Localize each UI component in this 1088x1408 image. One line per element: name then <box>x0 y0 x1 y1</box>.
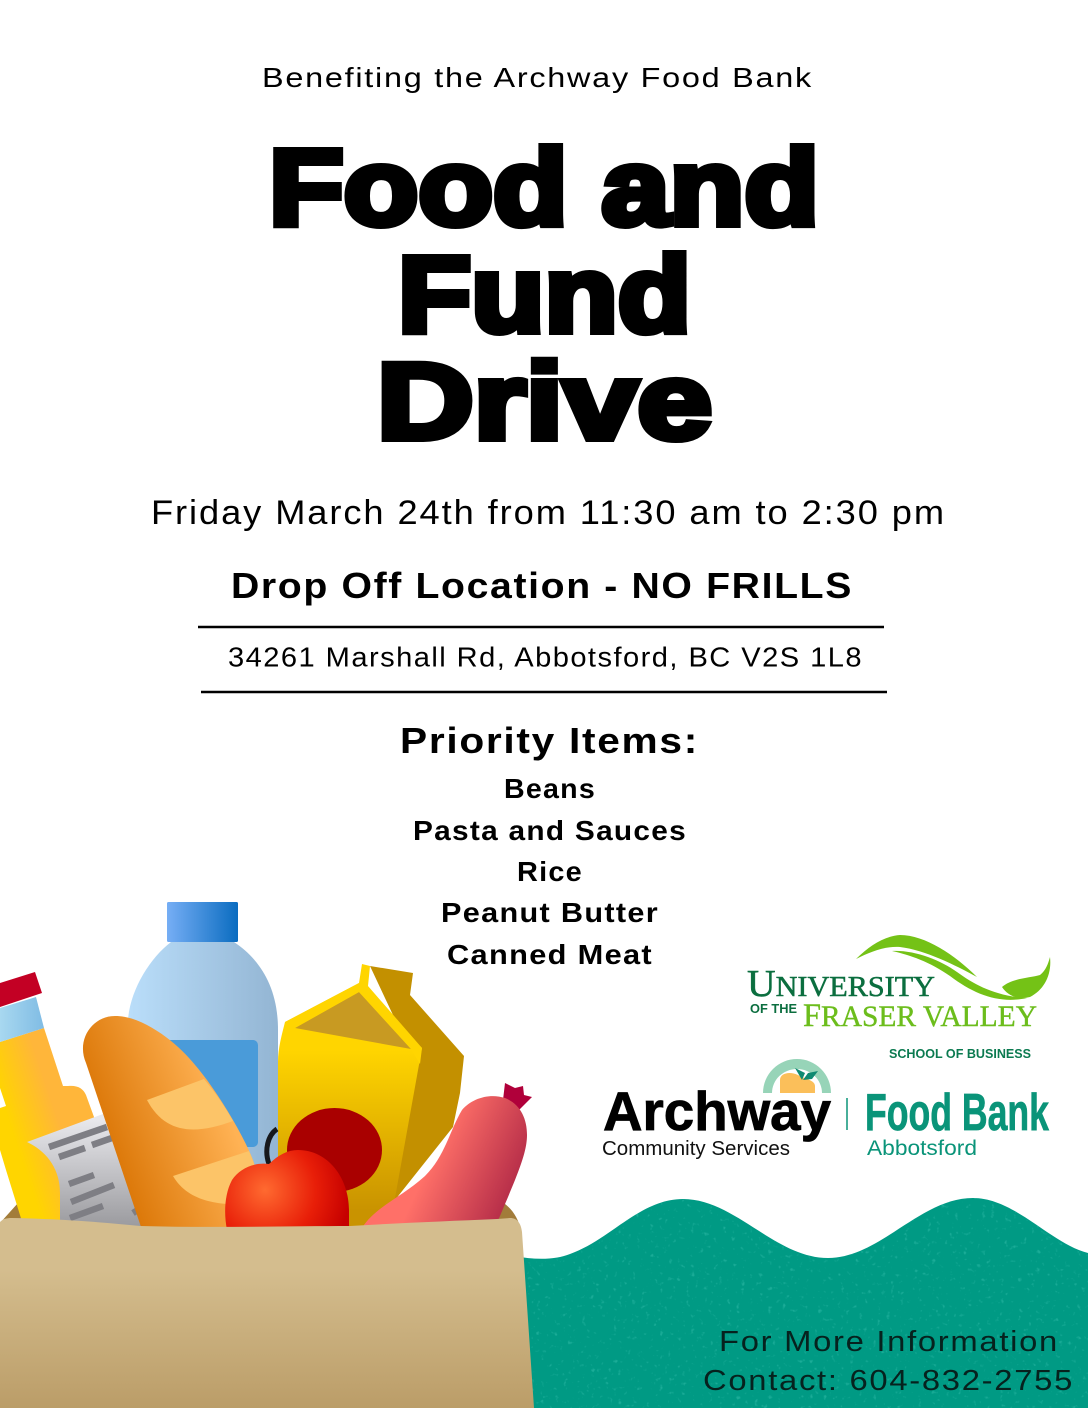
logo: University of the Fraser Valley <box>747 935 1050 1061</box>
priority items list: Rice <box>517 856 583 887</box>
priority items list: Beans <box>504 773 596 804</box>
contact block: For More Information <box>719 1326 1059 1358</box>
priority items list: Pasta and Sauces <box>413 815 687 846</box>
title: Fund <box>398 234 691 354</box>
logo: Archway Community Services <box>602 1059 831 1160</box>
red circle on carton <box>287 1108 382 1192</box>
priority items list: Peanut Butter <box>441 897 659 928</box>
logo: Food Bank Abbotsford <box>847 1084 1049 1160</box>
receipt <box>27 1114 145 1228</box>
logo: University of the Fraser Valley: SCHOOL OF BUSINESS <box>889 1046 1031 1061</box>
contact block <box>703 1326 1074 1397</box>
oil bottle <box>0 972 100 1228</box>
title <box>269 126 819 462</box>
logo: University of the Fraser Valley: UNIVERSITY <box>747 963 935 1005</box>
apple <box>225 1129 349 1230</box>
title: Drive <box>377 340 712 462</box>
priority items heading: Priority Items: <box>400 720 699 761</box>
logo: Archway Community Services: Archway <box>603 1080 831 1142</box>
logo: Archway Community Services: Community Services <box>602 1138 790 1160</box>
water bottle <box>128 902 278 1225</box>
baguette <box>83 1016 262 1230</box>
bag front <box>0 1218 534 1408</box>
teal wave footer <box>515 1198 1088 1408</box>
priority items list <box>413 773 687 970</box>
swoosh and leaf <box>856 935 1050 1000</box>
sausage <box>362 1083 532 1228</box>
title: Food and <box>269 126 819 248</box>
juice carton <box>278 964 464 1230</box>
logo: Food Bank Abbotsford: Abbotsford <box>867 1137 977 1160</box>
arch and apple mark <box>763 1059 831 1093</box>
logo: University of the Fraser Valley: FRASER VALLEY <box>803 998 1037 1034</box>
drop off heading: Drop Off Location - NO FRILLS <box>231 565 853 606</box>
priority items list: Canned Meat <box>447 939 653 970</box>
eyebrow: benefiting line: Benefiting the Archway Food Bank <box>262 62 813 93</box>
logo: University of the Fraser Valley: OF THE <box>750 1001 797 1016</box>
address block with rules: 34261 Marshall Rd, Abbotsford, BC V2S 1L8 <box>228 642 863 672</box>
bag back <box>0 1202 521 1240</box>
contact block: Contact: 604-832-2755 <box>703 1365 1074 1397</box>
illustration: grocery bag <box>0 902 534 1408</box>
date and time: Friday March 24th from 11:30 am to 2:30 pm <box>151 494 946 532</box>
